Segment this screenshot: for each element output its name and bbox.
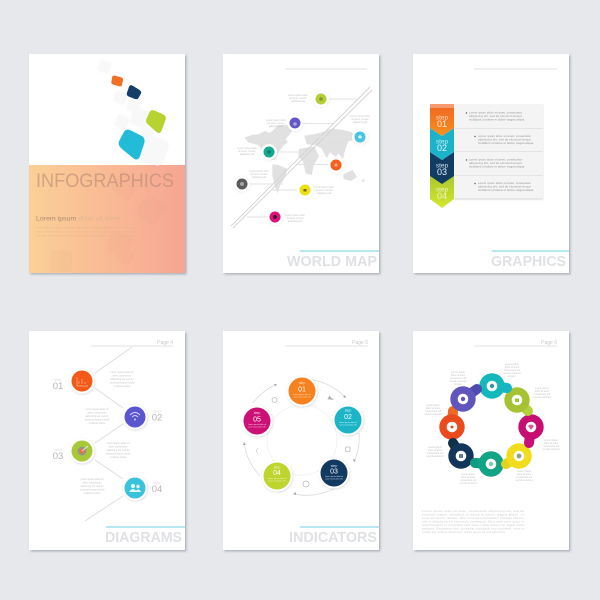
node captions: adipiscing elit, sed do xyxy=(81,485,104,488)
step 05: 05 xyxy=(253,416,261,424)
step 04: amet consectetur elit xyxy=(268,480,286,482)
step 02 xyxy=(332,404,364,436)
ring captions: Lorem ipsum xyxy=(426,404,440,407)
node 02 xyxy=(122,404,148,430)
map captions: Lorem ipsum dolor xyxy=(266,119,286,122)
ring captions: sed do eiusmod xyxy=(450,380,467,383)
bar text 1 xyxy=(466,110,525,122)
ring captions: consectetur elit xyxy=(425,410,441,413)
cover text block: veniam, quis nostrud exercitation ullamco laboris nisi aliquip commodo xyxy=(36,234,139,238)
step 05: Lorem ipsum dolor sit xyxy=(248,423,267,426)
bottom paragraph: nisi ut aliquip ex ea commodo consequat. Duis aute irure dolor in xyxy=(422,520,524,524)
step 3 ribbon xyxy=(430,152,454,184)
step 04 xyxy=(262,460,292,492)
map captions: adipiscing elit xyxy=(269,125,284,128)
step 3 ribbon: 03 xyxy=(437,167,447,177)
panel: diagrams page xyxy=(29,331,185,550)
node captions xyxy=(80,371,135,495)
panel: graphics page xyxy=(413,54,569,273)
cover text block: tempor incididunt ut labore et dolore magna aliqua. Ut enim ad minim xyxy=(36,230,138,234)
ring captions: tempor xyxy=(454,383,462,386)
gradient band xyxy=(29,165,185,273)
ring segment: green xyxy=(475,451,504,477)
map captions: sit amet, consec xyxy=(250,173,268,176)
outer arrows xyxy=(244,380,359,495)
step 4 ribbon: step xyxy=(436,186,449,194)
ring captions: sed do eiusmod xyxy=(460,482,477,485)
diagonal double line xyxy=(231,87,372,228)
node captions: ut labore dolore xyxy=(89,422,106,425)
node captions: adipiscing elit, sed do xyxy=(111,378,134,381)
gray icons xyxy=(256,396,350,487)
node captions: eiusmod tempor incidid xyxy=(106,452,131,456)
bar text 2: Lorem ipsum dolor sit amet, consectetur xyxy=(478,134,531,138)
map captions: adipiscing elit xyxy=(252,176,267,179)
map marker: orange xyxy=(328,157,344,173)
ring captions: dolor sit amet xyxy=(544,442,559,445)
map captions: Lorem ipsum dolor xyxy=(314,186,334,189)
node 04 xyxy=(122,476,148,500)
text bars xyxy=(454,104,543,198)
ring captions: dolor sit amet xyxy=(426,407,441,410)
map captions: sit amet, consec xyxy=(315,189,333,192)
panel: page six ring xyxy=(413,331,569,550)
ring captions: consectetur elit xyxy=(460,479,476,482)
node captions: eiusmod tempor incidid xyxy=(85,418,110,422)
ring captions: consectetur elit xyxy=(534,393,550,396)
bottom paragraph: enim ad minim veniam, quis nostrud exercitation ullamco laboris xyxy=(422,516,524,520)
step labels: 04 xyxy=(152,484,162,495)
bar text 1: Lorem ipsum dolor sit amet, consectetur xyxy=(469,110,522,114)
step 04: Lorem ipsum dolor sit xyxy=(268,477,287,480)
heading: diagrams: DIAGRAMS xyxy=(105,530,182,546)
ring captions: consectetur elit xyxy=(427,452,443,455)
ring captions xyxy=(425,363,560,485)
map captions: adipiscing elit xyxy=(291,100,306,103)
step 01 xyxy=(286,376,318,406)
map captions: sit amet, consec xyxy=(289,97,307,100)
step 1 ribbon xyxy=(430,104,454,136)
step labels: step xyxy=(153,480,162,485)
ring captions: dolor sit amet xyxy=(428,449,443,452)
step labels xyxy=(53,377,162,495)
node captions: amet, consectetur xyxy=(87,412,107,414)
map captions: sit amet, consec xyxy=(267,122,285,125)
navy square xyxy=(127,85,141,99)
map captions: sit amet, consec xyxy=(238,150,256,153)
ring captions: consectetur elit xyxy=(450,377,466,380)
step 2 ribbon xyxy=(430,128,454,160)
bar text 3 xyxy=(466,158,525,168)
step labels: step xyxy=(153,408,162,414)
step 05 xyxy=(242,406,272,436)
node captions: eiusmod tempor incidid xyxy=(110,382,135,384)
ring segment: magenta xyxy=(518,414,544,443)
node captions: ut labore dolore xyxy=(84,492,101,495)
bottom paragraph: reprehenderit in voluptate velit esse cillum dolore eu fugiat nulla xyxy=(422,523,524,527)
step labels: step xyxy=(54,447,63,452)
ring captions: Lorem ipsum xyxy=(505,363,519,366)
step labels: 03 xyxy=(53,451,63,462)
orange square xyxy=(111,76,123,86)
step 02: amet consectetur elit xyxy=(339,424,357,426)
bar text 3: Lorem ipsum dolor sit amet, consectetur xyxy=(469,158,522,162)
step 02: 02 xyxy=(344,414,352,421)
cyan square xyxy=(119,130,145,160)
lime square xyxy=(146,110,166,133)
ring captions: sed do eiusmod xyxy=(534,396,551,399)
ring segment: red xyxy=(439,411,465,440)
heading: infographics: INFOGRAPHICS xyxy=(36,171,174,192)
ring captions: sed do eiusmod xyxy=(427,455,444,458)
node captions: adipiscing elit, sed do xyxy=(86,415,109,418)
ring captions: dolor sit amet xyxy=(517,473,532,476)
bar text 4 xyxy=(474,181,534,192)
ring segment: purple xyxy=(450,386,477,412)
ring captions: sed do eiusmod xyxy=(543,448,560,451)
step 03: Lorem ipsum dolor sit xyxy=(325,475,344,478)
heading: indicators: INDICATORS xyxy=(289,530,377,546)
map captions: Lorem ipsum dolor xyxy=(237,147,257,150)
bar text 2: incididunt ut labore et dolore magna aliqua. xyxy=(478,141,534,145)
node captions: Lorem ipsum dolor sit xyxy=(111,371,134,374)
faint squares on band xyxy=(50,171,168,272)
map captions: sit amet, consec xyxy=(351,118,369,121)
step 01: Lorem ipsum dolor sit xyxy=(293,393,312,396)
ring captions: consectetur elit xyxy=(516,476,532,479)
page number: Page 4 xyxy=(157,340,173,346)
node captions: adipiscing elit, sed do xyxy=(107,449,130,452)
ring segment: navy xyxy=(448,443,474,469)
bar text 2 xyxy=(474,134,534,145)
ring captions: Lorem ipsum xyxy=(517,470,531,473)
step 3 ribbon: step xyxy=(436,162,449,170)
step 04: step xyxy=(274,466,280,470)
panel: infographics cover xyxy=(29,54,185,273)
heading: world map: WORLD MAP xyxy=(287,254,377,270)
step 4 ribbon: 04 xyxy=(437,191,447,201)
step labels: 02 xyxy=(152,412,162,424)
map marker: gray xyxy=(234,176,250,192)
bar text 1: incididunt ut labore et dolore magna aliqua. xyxy=(469,118,525,122)
ring captions: dolor sit amet xyxy=(505,366,520,369)
step 2 ribbon: step xyxy=(436,138,449,146)
step 03: step xyxy=(331,464,337,468)
cover text block: Lorem ipsum dolor sit amet, consectetur adipiscing elit, sed do eiusmod xyxy=(36,226,139,230)
map marker: purple xyxy=(287,115,303,131)
node captions: Lorem ipsum dolor sit xyxy=(86,408,109,411)
node 03 xyxy=(70,438,94,464)
page number: Page 5 xyxy=(352,340,368,346)
connector lines xyxy=(247,99,358,217)
map captions: Lorem ipsum dolor xyxy=(288,94,308,97)
step 2 ribbon: 02 xyxy=(437,143,447,153)
step 01: amet consectetur elit xyxy=(293,396,311,398)
ring captions: sed do eiusmod xyxy=(504,372,521,375)
step labels: 01 xyxy=(53,381,63,392)
bar text 2: adipiscing elit, sed do eiusmod tempor xyxy=(478,138,531,142)
bar text 1: adipiscing elit, sed do eiusmod tempor xyxy=(469,114,522,118)
panel: indicators page xyxy=(223,331,379,550)
step 01: step xyxy=(299,381,305,385)
subheading: Lorem ipsum dolor sit amet xyxy=(36,216,120,222)
node captions: Lorem ipsum dolor sit xyxy=(107,442,130,445)
step 4 ribbon xyxy=(430,175,454,208)
map captions: Lorem ipsum dolor xyxy=(285,214,305,217)
ring captions: Lorem ipsum xyxy=(535,387,549,390)
map marker: teal xyxy=(261,144,277,160)
ring captions: Lorem ipsum xyxy=(544,439,558,442)
node 01 xyxy=(70,368,94,394)
panel: world map page xyxy=(223,54,379,273)
step 1 ribbon: step xyxy=(436,114,449,122)
map captions: Lorem ipsum dolor xyxy=(350,115,370,118)
bar text 4: incididunt ut labore et dolore magna aliqua. xyxy=(478,188,534,192)
node captions: ut labore dolore xyxy=(110,456,127,459)
bar text 3: adipiscing elit, sed do eiusmod tempor xyxy=(469,161,522,165)
ring segment: yellow xyxy=(506,443,532,469)
map captions: adipiscing elit xyxy=(317,192,332,195)
bottom paragraph: culpa qui officia deserunt mollit anim id est laborum. xyxy=(422,530,506,534)
step 03: amet consectetur elit xyxy=(325,478,343,480)
cover text block xyxy=(36,226,139,238)
ring captions: consectetur elit xyxy=(543,445,559,448)
node captions: amet, consectetur xyxy=(108,446,128,448)
step 04: 04 xyxy=(273,470,281,477)
bar text 4: adipiscing elit, sed do eiusmod tempor xyxy=(478,184,531,188)
bottom paragraph xyxy=(422,509,524,534)
arrow heads xyxy=(243,384,356,495)
map captions: adipiscing elit xyxy=(353,121,368,124)
ring captions: sed do eiusmod xyxy=(516,479,533,482)
map marker: yellow xyxy=(297,182,313,198)
map captions xyxy=(237,94,370,223)
page number: Page 6 xyxy=(541,340,557,346)
map marker: cyan xyxy=(352,129,368,145)
ring segment: olive xyxy=(504,387,530,413)
connector lines xyxy=(85,347,132,521)
step 05: step xyxy=(254,411,260,415)
ring captions: sed do eiusmod xyxy=(425,413,442,416)
map marker: magenta xyxy=(267,209,283,225)
ring captions: Lorem ipsum xyxy=(461,473,475,476)
step labels: step xyxy=(54,377,63,382)
node captions: ut labore dolore xyxy=(114,385,131,388)
ring captions: tempor xyxy=(508,375,516,378)
ring captions: Lorem ipsum xyxy=(451,371,465,374)
inner faint ring xyxy=(267,405,337,475)
ring captions: dolor sit amet xyxy=(535,390,550,393)
node captions: amet, consectetur xyxy=(82,482,102,484)
step 03: 03 xyxy=(330,468,338,476)
bar text 4: Lorem ipsum dolor sit amet, consectetur xyxy=(478,181,531,185)
bar text 3: incididunt ut labore et dolore magna aliqua. xyxy=(469,164,525,168)
step 01: 01 xyxy=(298,386,306,394)
bottom paragraph: Lorem ipsum dolor sit amet, consectetur adipiscing elit, sed do xyxy=(422,509,524,513)
step 02: Lorem ipsum dolor sit xyxy=(339,421,358,424)
ring captions: dolor sit amet xyxy=(461,476,476,479)
ring captions: consectetur elit xyxy=(504,369,520,372)
ring captions: Lorem ipsum xyxy=(428,446,442,449)
bottom paragraph: pariatur. Excepteur sint occaecat cupidatat non proident, sunt in xyxy=(422,526,524,530)
step 03 xyxy=(318,458,350,488)
world map xyxy=(244,125,365,193)
map captions: adipiscing elit xyxy=(288,220,303,223)
step 1 ribbon: 01 xyxy=(437,119,447,129)
bottom paragraph: eiusmod tempor incididunt ut labore et dolore magna aliqua. Ut xyxy=(422,512,524,516)
node captions: Lorem ipsum dolor sit xyxy=(81,478,104,481)
ring captions: dolor sit amet xyxy=(451,374,466,377)
map captions: sit amet, consec xyxy=(286,217,304,220)
step 02: step xyxy=(345,408,351,412)
step 05: amet consectetur elit xyxy=(248,426,266,428)
node captions: amet, consectetur xyxy=(112,374,132,378)
map captions: Lorem ipsum dolor xyxy=(249,170,269,173)
heading: graphics: GRAPHICS xyxy=(491,254,566,270)
map marker: lime xyxy=(313,91,329,107)
faint white squares xyxy=(98,60,169,167)
ring segment: teal xyxy=(479,373,507,399)
map captions: adipiscing elit xyxy=(240,153,255,156)
node captions: eiusmod tempor incidid xyxy=(80,488,105,492)
